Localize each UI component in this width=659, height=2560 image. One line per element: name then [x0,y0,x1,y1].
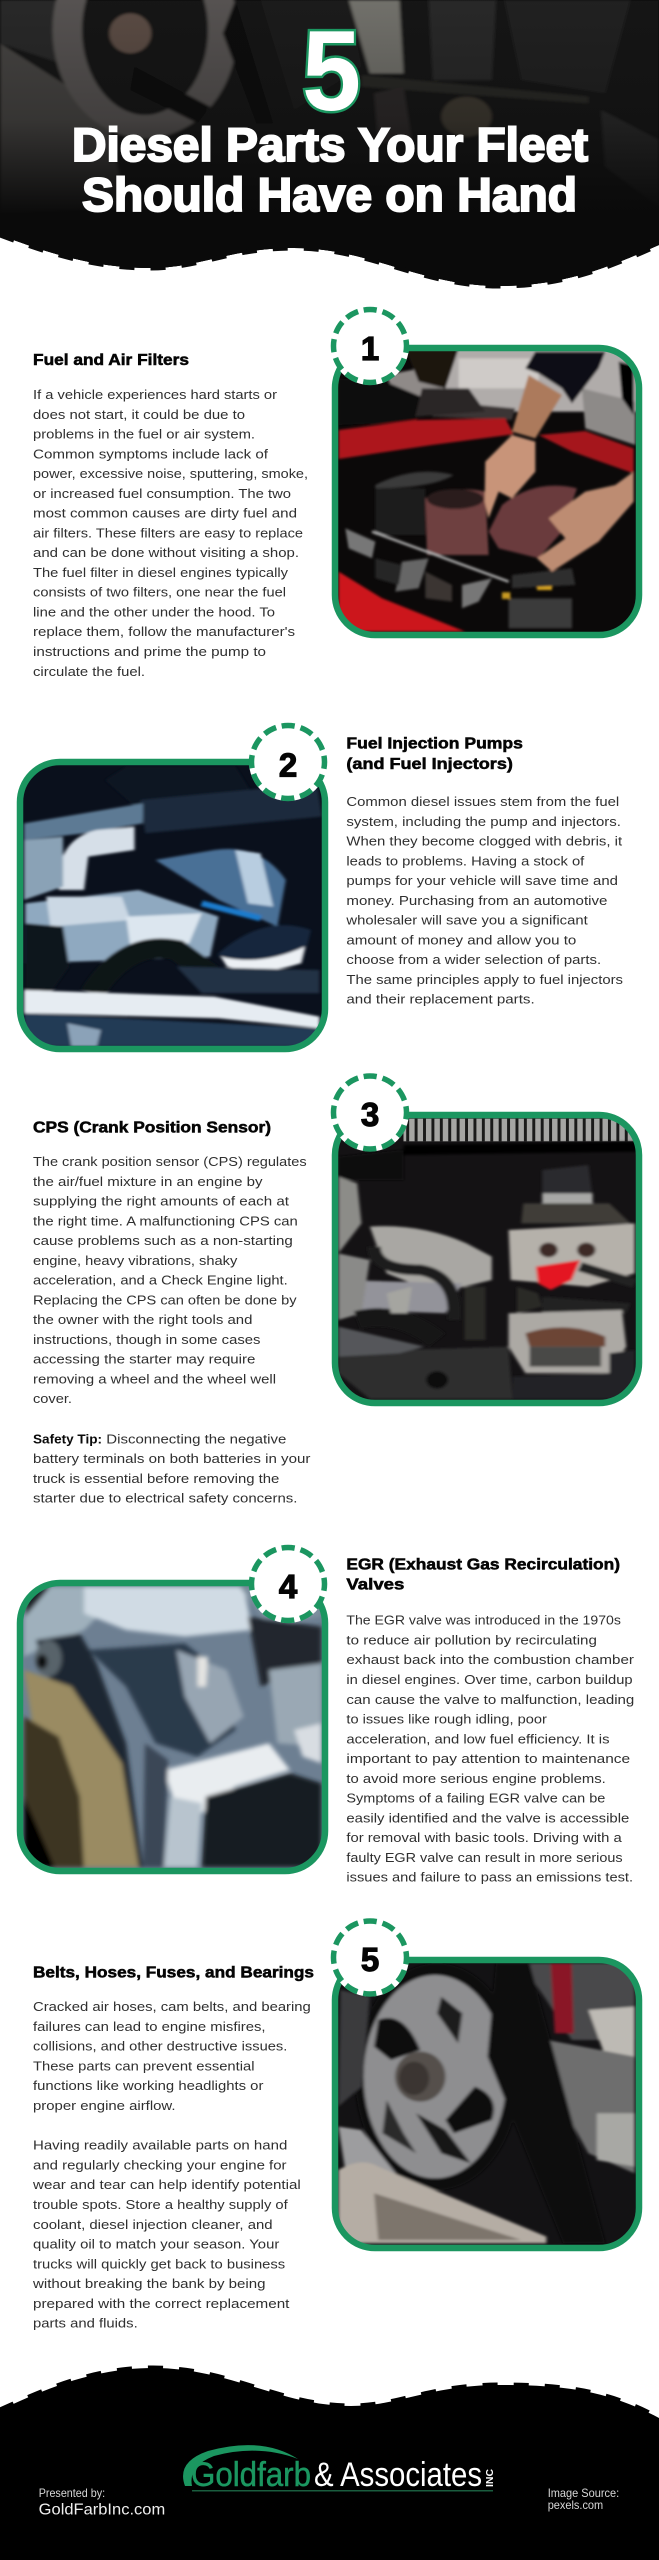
safety tip: truck is essential before removing the [33,1471,279,1486]
body text: trouble spots. Store a healthy supply of [33,2197,288,2212]
footer wave background [0,2368,659,2560]
body text: proper engine airflow. [33,2098,176,2113]
body text: quality oil to match your season. Your [33,2237,280,2252]
body text: or increased fuel consumption. The two [33,486,291,501]
number badge 4: 4 [279,1568,298,1605]
presented by: Presented by: [39,2486,105,2500]
presented by [39,2486,165,2518]
section 2: fuel injection pumps [17,720,623,1053]
green frame [335,348,639,635]
title: Diesel Parts Your Fleet [72,118,588,171]
body text [346,1613,635,1885]
safety tip: starter due to electrical safety concerns. [33,1491,297,1506]
body text: amount of money and allow you to [346,932,576,947]
body text: exhaust back into the combustion chamber [346,1652,635,1667]
body text: easily identified and the valve is accessible [346,1810,629,1825]
body text: These parts can prevent essential [33,2058,254,2073]
body text: parts and fluids. [33,2316,138,2331]
body text: without breaking the bank by being [32,2276,265,2291]
presented by: GoldFarbInc.com [39,2501,165,2518]
body text: supplying the right amounts of each at [33,1194,290,1208]
body text: failures can lead to engine misfires, [33,2019,266,2034]
body text: power, excessive noise, sputtering, smoke, [33,466,308,481]
heading: Belts, Hoses, Fuses, and Bearings [33,1964,314,1981]
body text: functions like working headlights or [33,2078,264,2093]
photo: chrome EGR valve close-up [17,1580,328,1877]
logo: Goldfarb & Associates: INC [485,2469,496,2487]
body text: instructions and prime the pump to [33,644,266,659]
safety tip [33,1431,311,1506]
green frame [335,1115,639,1403]
photo: hands replacing air filter [332,345,642,638]
body text: the right time. A malfunctioning CPS can [33,1213,298,1228]
photo: timing belt and pulley [332,1957,643,2250]
number badge 2: 2 [279,746,297,784]
body text: wear and tear can help identify potential [32,2177,301,2192]
body text: does not start, it could be due to [33,407,245,422]
safety tip: battery terminals on both batteries in your [33,1451,311,1466]
body text: engine, heavy vibrations, shaky [33,1253,238,1268]
body text: the air/fuel mixture in an engine by [33,1174,263,1189]
body text: The same principles apply to fuel injectors [346,972,623,987]
body text: replace them, follow the manufacturer's [33,624,295,639]
body text: accessing the starter may require [33,1352,255,1367]
heading: CPS (Crank Position Sensor) [33,1119,271,1136]
body text: to issues like rough idling, poor [346,1712,548,1726]
body text [345,794,623,1007]
body text: pumps for your vehicle will save time and [346,873,618,888]
section 1: fuel and air filters [33,304,642,679]
body text: prepared with the correct replacement [33,2296,290,2311]
body text: and can be done without visiting a shop. [33,545,299,560]
body text: the owner with the right tools and [33,1312,252,1327]
body text: Replacing the CPS can often be done by [33,1292,297,1307]
safety tip: Safety Tip: [33,1431,102,1446]
number badge 4 [246,1542,330,1626]
header engine photo background [0,0,659,300]
body text: choose from a wider selection of parts. [346,952,601,967]
number badge 5 [328,1915,412,2000]
number badge 3: 3 [361,1096,379,1133]
heading: EGR (Exhaust Gas Recirculation) [346,1556,620,1573]
heading [346,1556,620,1593]
heading: Fuel and Air Filters [33,352,189,369]
image source: Image Source: [548,2486,619,2500]
body text: The EGR valve was introduced in the 1970s [346,1613,621,1628]
body text: faulty EGR valve can result in more serious [346,1850,623,1865]
logo: Goldfarb & Associates [183,2445,496,2494]
body text: to reduce air pollution by recirculating [346,1632,597,1648]
body text: Common symptoms include lack of [33,446,269,461]
body text: acceleration, and low fuel efficiency. It is [346,1731,610,1746]
body text: coolant, diesel injection cleaner, and [33,2217,273,2232]
number badge 3 [328,1070,412,1155]
body text: cover. [33,1391,72,1406]
title [72,118,588,221]
body text: Cracked air hoses, cam belts, and bearing [33,1999,311,2014]
body text: problems in the fuel or air system. [33,426,255,442]
body text: wholesaler will save you a significant [345,913,588,928]
body text: The fuel filter in diesel engines typically [33,565,289,580]
body text: to avoid more serious engine problems. [346,1771,606,1786]
body text: cause problems such as a non-starting [33,1233,293,1248]
body text: circulate the fuel. [33,664,145,679]
body text: When they become clogged with debris, it [346,834,623,848]
footer torn edge [0,2368,659,2418]
section 3: crank position sensor [33,1070,643,1506]
number badge 1: 1 [361,330,379,367]
body text: system, including the pump and injectors. [346,814,621,829]
body text: leads to problems. Having a stock of [346,853,585,868]
body text: for removal with basic tools. Driving with a [346,1830,623,1845]
body text: in diesel engines. Over time, carbon buildup [346,1672,633,1687]
number badge 5: 5 [361,1941,379,1978]
photo: chrome engine in blue tones [17,757,328,1053]
heading: Valves [346,1576,405,1593]
body text: The crank position sensor (CPS) regulates [33,1154,307,1169]
body text: Symptoms of a failing EGR valve can be [346,1791,605,1806]
title: Should Have on Hand [82,168,577,221]
number badge 2 [246,720,330,804]
body text: instructions, though in some cases [33,1332,260,1347]
heading: Fuel Injection Pumps [346,735,523,752]
body text [33,1154,307,1406]
number badge 1 [328,304,412,388]
body text: If a vehicle experiences hard starts or [33,387,278,402]
big number 5: 5 [302,8,361,135]
body text: air filters. These filters are easy to replace [33,525,303,540]
body text: line and the other under the hood. To [33,604,275,620]
body text: consists of two filters, one near the fuel [33,585,286,600]
green frame [20,762,325,1049]
body text: and regularly checking your engine for [33,2158,287,2172]
body text: removing a wheel and the wheel well [33,1372,276,1386]
section 5: belts, hoses, fuses, bearings [32,1915,643,2331]
section 4: EGR valves [17,1542,635,1885]
body text: collisions, and other destructive issues. [33,2038,287,2054]
body text: issues and failure to pass an emissions test. [346,1870,633,1885]
body text: most common causes are dirty fuel and [33,506,297,521]
header torn edge [0,235,659,286]
green frame [20,1583,325,1871]
logo: Goldfarb & Associates: & Associates [314,2456,482,2494]
green frame [335,1960,639,2248]
body text: Common diesel issues stem from the fuel [346,794,619,809]
body text: trucks will quickly get back to business [33,2256,285,2271]
body text: important to pay attention to maintenance [346,1751,630,1766]
heading: (and Fuel Injectors) [346,756,513,773]
body text: acceleration, and a Check Engine light. [33,1273,288,1288]
body text [32,1999,311,2331]
image source [548,2486,619,2512]
body text [33,387,308,679]
header banner [0,0,659,300]
safety tip: Disconnecting the negative [106,1431,286,1446]
body text: can cause the valve to malfunction, leading [346,1692,634,1707]
body text: and their replacement parts. [346,992,535,1007]
photo: engine bay with red terminal cap [332,1110,643,1407]
logo: Goldfarb & Associates: Goldfarb [191,2456,311,2494]
heading [346,735,523,773]
body text: Having readily available parts on hand [33,2138,287,2153]
body text: money. Purchasing from an automotive [346,893,607,908]
footer [0,2368,659,2560]
image source: pexels.com [548,2498,603,2512]
